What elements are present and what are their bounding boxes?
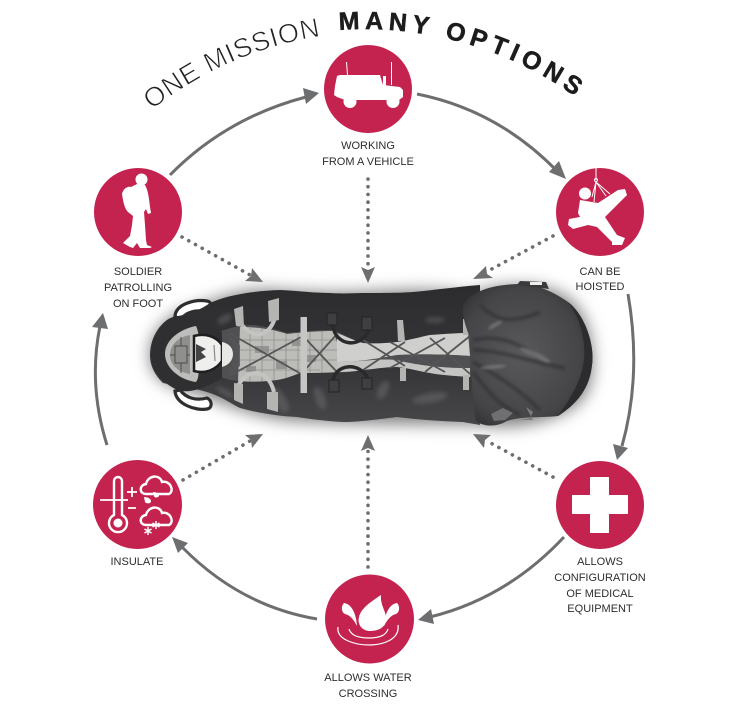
icon: hoisted person <box>568 167 627 245</box>
title <box>145 12 582 106</box>
label: ALLOWS WATER <box>324 672 412 684</box>
node: soldier patrolling on foot <box>94 168 182 310</box>
arrow: vehicle to hoisted <box>417 94 566 179</box>
dotted arrows to bag <box>182 179 553 567</box>
icon: water splash <box>342 595 399 631</box>
title: MANY OPTIONS <box>340 12 582 94</box>
node: insulate <box>93 460 182 568</box>
helmet <box>165 326 199 382</box>
icon: vehicle <box>334 62 403 108</box>
foot end hood <box>463 284 593 426</box>
red circle <box>556 461 644 549</box>
label: ON FOOT <box>113 298 163 310</box>
hood drawcord <box>497 407 533 420</box>
bag body <box>150 285 480 425</box>
red circle <box>94 168 182 256</box>
label: SOLDIER <box>114 266 162 278</box>
arrow: water to insulate <box>172 537 317 619</box>
label: PATROLLING <box>104 282 172 294</box>
red circle <box>556 168 644 256</box>
light tabs <box>234 298 469 412</box>
fold highlights <box>215 312 449 415</box>
label: CONFIGURATION <box>554 572 646 584</box>
icon: soldier <box>122 174 152 248</box>
arrow: hoisted to medical <box>613 294 634 460</box>
cycle arrows <box>92 88 634 624</box>
red circle <box>93 460 182 549</box>
hood folds <box>473 305 565 415</box>
icon: rain drops <box>144 492 159 503</box>
icon: thermometer <box>100 477 137 532</box>
arrow: soldier to vehicle <box>170 88 319 175</box>
label: WORKING <box>341 140 395 152</box>
crossed straps <box>229 333 470 376</box>
legs <box>337 333 470 362</box>
face <box>194 335 222 372</box>
label: INSULATE <box>111 556 163 568</box>
red circle <box>325 574 414 664</box>
straps dark loops <box>333 326 369 381</box>
label: FROM A VEHICLE <box>322 156 414 168</box>
node: medical equipment <box>554 461 646 615</box>
label: ALLOWS <box>577 556 623 568</box>
title: ONE MISSION <box>145 18 318 106</box>
opening with body <box>205 325 471 382</box>
red circle <box>324 45 412 133</box>
dark square patches <box>327 313 372 392</box>
node: working from a vehicle <box>322 45 414 168</box>
node: can be hoisted <box>556 167 644 293</box>
head end: hood <box>151 316 222 391</box>
bag shadow <box>150 286 593 426</box>
label: EQUIPMENT <box>567 603 633 615</box>
node: water crossing <box>324 574 414 700</box>
label: CAN BE <box>580 266 620 278</box>
hood strap top <box>517 281 549 289</box>
handles <box>175 301 211 409</box>
torso camouflage <box>238 327 337 382</box>
arrow: insulate to soldier <box>92 313 108 445</box>
icon: medical cross <box>572 477 628 533</box>
illustration: sleeping bag with soldier <box>150 281 593 426</box>
label: OF MEDICAL <box>566 588 634 600</box>
arrow: medical to water <box>418 537 564 624</box>
tab loops <box>238 318 275 392</box>
icon: weather clouds <box>141 477 172 535</box>
label: CROSSING <box>339 688 397 700</box>
label: HOISTED <box>576 281 624 293</box>
